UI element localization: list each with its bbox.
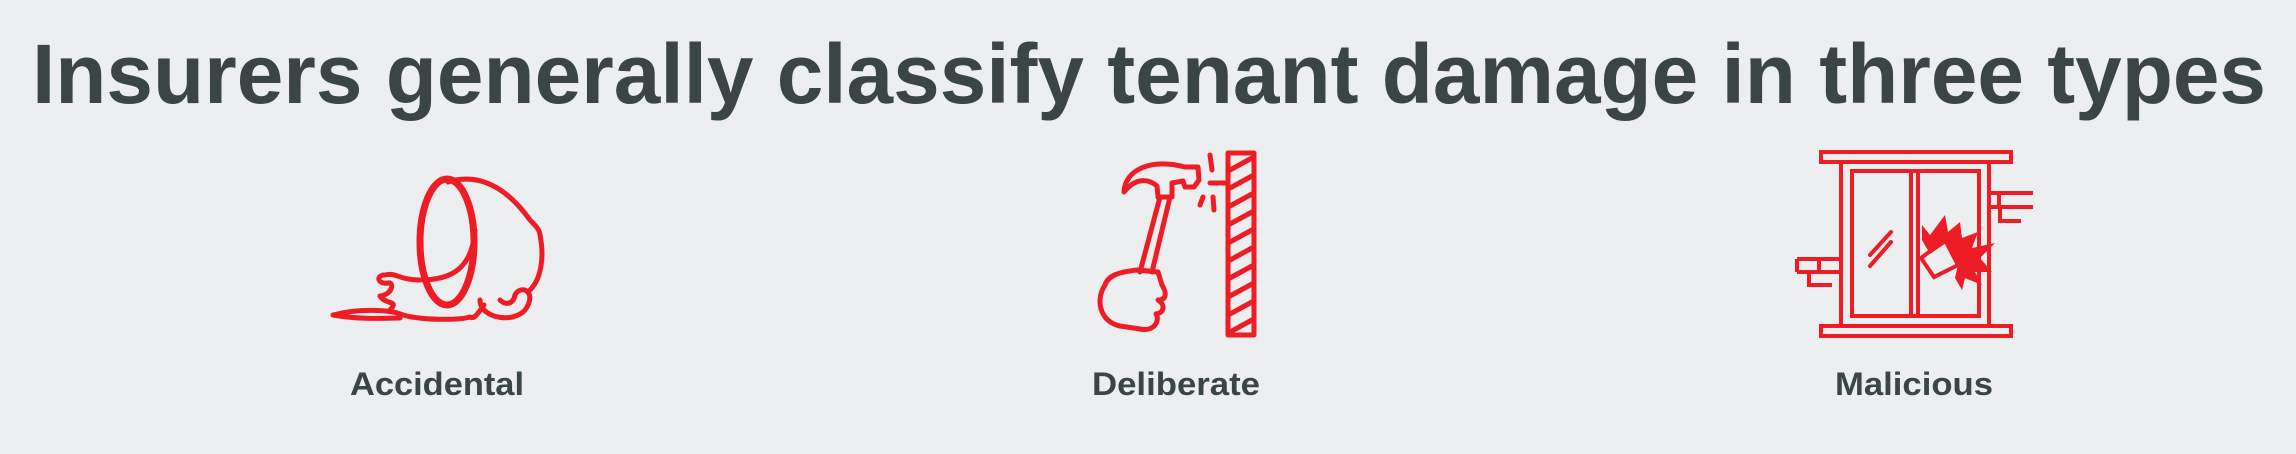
panel: accidental bbox=[333, 179, 542, 402]
panel: deliberate bbox=[1092, 153, 1260, 402]
title: Insurers generally classify tenant damage in three types bbox=[32, 27, 2266, 121]
label: Malicious: Malicious bbox=[1835, 366, 1993, 402]
label: Deliberate: Deliberate bbox=[1092, 366, 1260, 402]
label: Accidental: Accidental bbox=[350, 366, 524, 402]
icon: spilled cup bbox=[333, 179, 542, 319]
icon: broken window bbox=[1797, 152, 2033, 336]
icon: hammer and wall bbox=[1100, 153, 1254, 335]
panel: malicious bbox=[1797, 152, 2033, 336]
